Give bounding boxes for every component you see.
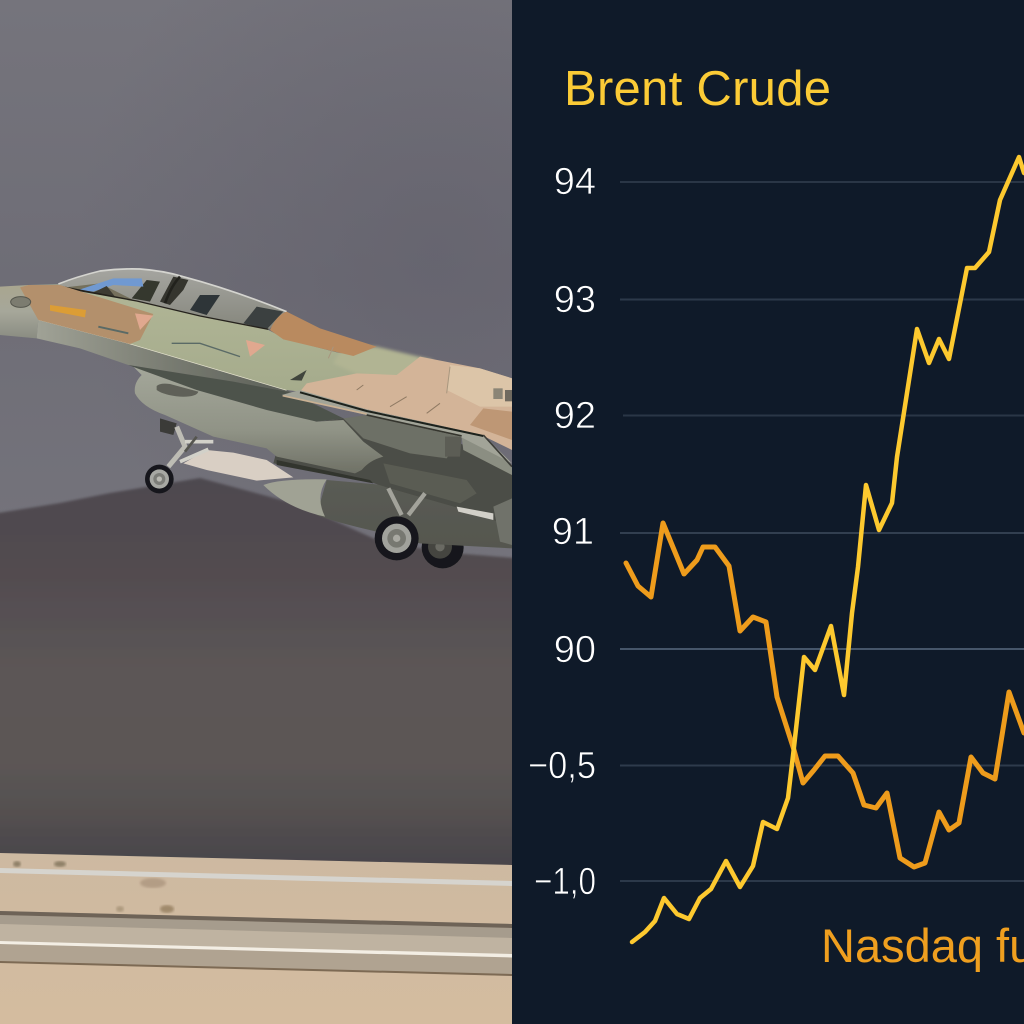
y-axis labels <box>528 161 596 903</box>
second main wheel <box>422 526 464 568</box>
panel: dark chart background <box>512 0 1024 1024</box>
Nasdaq futures line <box>626 523 1024 867</box>
panel: fighter jet photo <box>0 0 540 1024</box>
fuel tank <box>263 479 512 548</box>
underside white payload <box>183 450 293 481</box>
sky background <box>0 0 512 560</box>
fighter jet <box>0 269 512 568</box>
y-axis labels: −0,5 <box>528 745 596 787</box>
fuselage camouflage <box>0 284 512 450</box>
intake and belly <box>133 367 383 473</box>
Brent Crude line <box>632 157 1024 942</box>
canopy <box>58 269 287 330</box>
tail fin at right edge <box>493 498 512 545</box>
gridlines <box>620 182 1024 881</box>
y-axis labels: 90 <box>554 629 596 671</box>
y-axis labels: −1,0 <box>534 861 596 903</box>
chart: Brent Crude vs Nasdaq futures <box>528 62 1024 972</box>
wing <box>282 390 512 475</box>
y-axis labels: 93 <box>554 279 596 321</box>
label: Brent Crude: Brent Crude <box>564 62 831 116</box>
desert ground and runway <box>0 853 512 1024</box>
distant hills <box>0 478 540 868</box>
y-axis labels: 91 <box>552 511 594 553</box>
nose landing gear <box>145 418 213 493</box>
main landing gear <box>375 488 425 560</box>
lower dark fuselage <box>273 418 512 527</box>
y-axis labels: 92 <box>554 395 596 437</box>
y-axis labels: 94 <box>554 161 596 203</box>
